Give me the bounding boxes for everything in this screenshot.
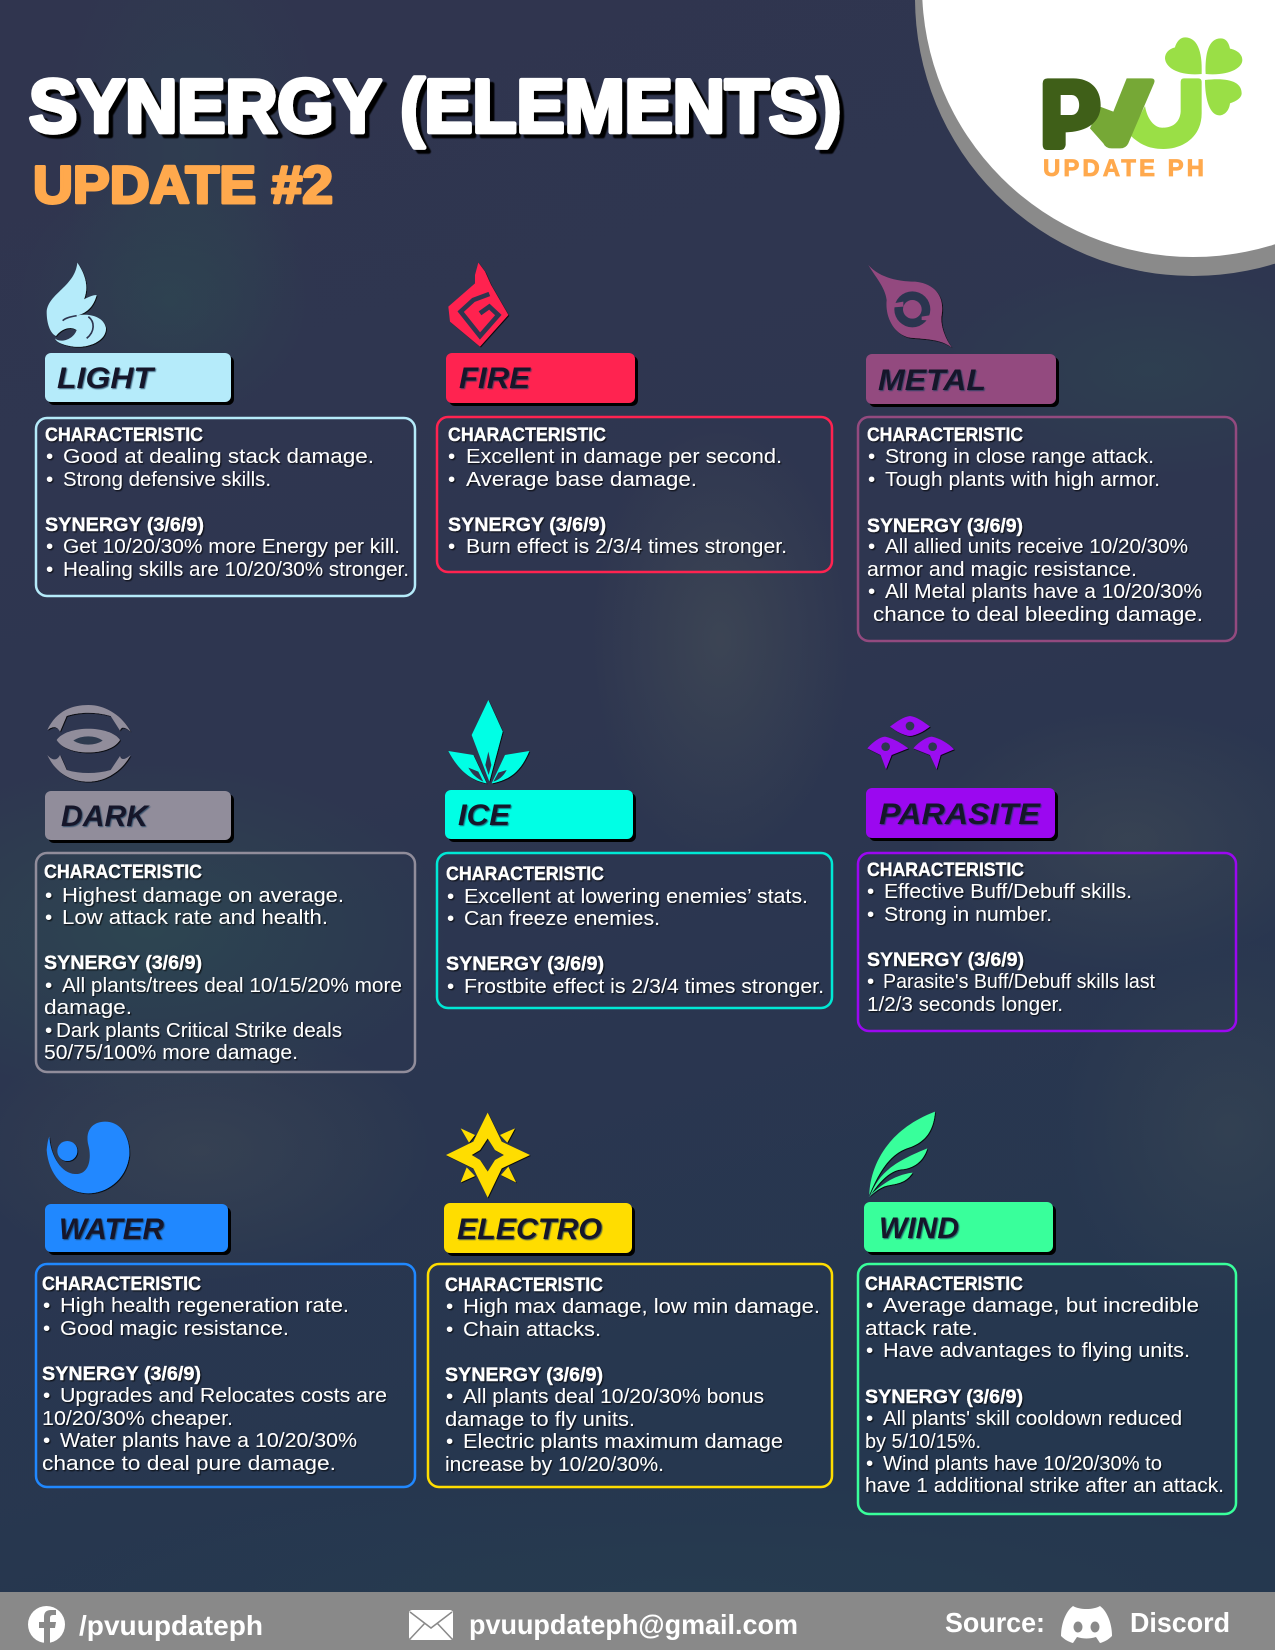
label: FIRE: FIRE [459, 362, 531, 395]
text box: parasite: SYNERGY (3/6/9) [867, 949, 1024, 971]
label: ICE: ICE [458, 799, 511, 832]
text box: ice: • [447, 975, 454, 998]
text box: water: High health regeneration rate. [60, 1294, 349, 1317]
text box: electro: • [446, 1295, 453, 1318]
text box: electro: Chain attacks. [463, 1318, 601, 1341]
panel: ice [437, 700, 832, 1008]
title: SYNERGY (ELEMENTS) [29, 64, 841, 148]
text box: fire: • [448, 535, 455, 558]
subtitle: UPDATE #2 [33, 156, 333, 215]
label: DARK: DARK [61, 800, 150, 833]
discord label: Discord [1130, 1607, 1230, 1638]
text box: metal: Strong in close range attack. [885, 445, 1154, 468]
text box: water: • [43, 1429, 50, 1452]
text box: electro: increase by 10/20/30%. [445, 1453, 664, 1476]
text box: dark: • [45, 1019, 52, 1042]
text box: wind: • [866, 1407, 873, 1430]
text box: water: • [43, 1294, 50, 1317]
text box: metal: CHARACTERISTIC [867, 424, 1023, 446]
text box: parasite: 1/2/3 seconds longer. [867, 993, 1063, 1016]
text box: light: • [46, 445, 53, 468]
text box: dark: SYNERGY (3/6/9) [44, 952, 202, 974]
text box: fire: SYNERGY (3/6/9) [448, 514, 606, 536]
icon: discord [1061, 1606, 1112, 1643]
email address: pvuupdateph@gmail.com [469, 1609, 798, 1640]
text box: dark [36, 853, 415, 1072]
text box: fire: • [448, 445, 455, 468]
label: PARASITE: PARASITE [879, 798, 1041, 831]
text box: fire: • [448, 468, 455, 491]
text box: light: Good at dealing stack damage. [63, 445, 374, 468]
text box: electro: • [446, 1318, 453, 1341]
label: WATER [45, 1204, 231, 1255]
text box: metal: • [868, 535, 875, 558]
text box: wind: by 5/10/15%. [865, 1430, 981, 1453]
text box: light [36, 418, 415, 596]
text box: light: Strong defensive skills. [63, 468, 271, 491]
text box: water: Upgrades and Relocates costs are [60, 1384, 387, 1407]
text box: wind: Have advantages to flying units. [883, 1339, 1190, 1362]
text box: ice: Frostbite effect is 2/3/4 times stronger. [464, 975, 824, 998]
text box: dark: 50/75/100% more damage. [44, 1041, 298, 1064]
icon: parasite [867, 716, 954, 769]
text box: wind: • [866, 1294, 873, 1317]
text box: wind [858, 1264, 1236, 1514]
text box: parasite: Strong in number. [884, 903, 1052, 926]
text box: electro: CHARACTERISTIC [445, 1274, 603, 1296]
text box: light: Healing skills are 10/20/30% stronger. [63, 558, 409, 581]
label: WATER: WATER [59, 1213, 164, 1246]
icon: water [47, 1122, 129, 1193]
icon: light flame [47, 263, 106, 347]
text box: metal: SYNERGY (3/6/9) [867, 515, 1023, 537]
text box: water: 10/20/30% cheaper. [42, 1407, 233, 1430]
panel: water [36, 1122, 415, 1487]
icon: electro [446, 1113, 530, 1198]
icon: dark [47, 705, 131, 782]
text box: parasite: CHARACTERISTIC [867, 859, 1024, 881]
text box: parasite: Effective Buff/Debuff skills. [884, 880, 1132, 903]
text box: metal: All allied units receive 10/20/30% [885, 535, 1188, 558]
text box: wind: Average damage, but incredible [883, 1294, 1199, 1317]
text box: wind: have 1 additional strike after an attack. [865, 1474, 1224, 1497]
text box: dark: • [45, 906, 52, 929]
label: LIGHT [45, 353, 234, 405]
text box: ice: CHARACTERISTIC [446, 863, 604, 885]
label: ELECTRO: ELECTRO [457, 1213, 602, 1246]
text box: parasite [858, 853, 1236, 1031]
icon: fire [448, 263, 508, 347]
text box: light: SYNERGY (3/6/9) [45, 514, 204, 536]
text box: parasite: • [867, 880, 874, 903]
text box: fire: Average base damage. [466, 468, 697, 491]
facebook handle: /pvuupdateph [79, 1610, 263, 1641]
text box: light: • [46, 535, 53, 558]
logo corner circle [915, 0, 1275, 276]
text box: water: CHARACTERISTIC [42, 1273, 201, 1295]
text box: electro: • [446, 1430, 453, 1453]
icon: wind [868, 1112, 935, 1197]
text box: wind: attack rate. [865, 1317, 978, 1340]
text box: metal: • [868, 580, 875, 603]
label: DARK [45, 791, 234, 843]
text box: dark: Low attack rate and health. [62, 906, 328, 929]
text box: parasite: • [867, 970, 874, 993]
panel: dark [36, 705, 415, 1072]
text box: ice: Excellent at lowering enemies’ stats. [464, 885, 808, 908]
panel: light [36, 263, 415, 596]
text box: ice [437, 853, 832, 1008]
label: PARASITE [866, 788, 1058, 841]
text box: metal: • [868, 445, 875, 468]
text box: water [36, 1264, 415, 1487]
label: METAL [866, 354, 1059, 407]
text box: dark: • [45, 884, 52, 907]
label: METAL: METAL [878, 364, 986, 397]
text box: dark: CHARACTERISTIC [44, 861, 202, 883]
text box: water: Water plants have a 10/20/30% [60, 1429, 357, 1452]
text box: dark: Dark plants Critical Strike deals [56, 1019, 342, 1042]
text box: water: Good magic resistance. [60, 1317, 289, 1340]
label: FIRE [446, 353, 638, 406]
text box: water: • [43, 1384, 50, 1407]
text box: light: Get 10/20/30% more Energy per kill. [63, 535, 400, 558]
text box: light: • [46, 558, 53, 581]
text box: wind: CHARACTERISTIC [865, 1273, 1023, 1295]
text box: water: SYNERGY (3/6/9) [42, 1363, 201, 1385]
logo: PVU Update PH: UPDATE PH [1043, 155, 1204, 182]
text box: light: • [46, 468, 53, 491]
text box: metal: armor and magic resistance. [867, 558, 1137, 581]
text box: fire: Excellent in damage per second. [466, 445, 782, 468]
text box: water: • [43, 1317, 50, 1340]
icon: ice [448, 700, 529, 783]
text box: metal: chance to deal bleeding damage. [873, 603, 1203, 626]
text box: ice: • [447, 907, 454, 930]
text box: metal: • [868, 468, 875, 491]
text box: parasite: • [867, 903, 874, 926]
text box: electro [428, 1264, 832, 1487]
icon: facebook [28, 1606, 65, 1643]
text box: electro: High max damage, low min damage. [463, 1295, 820, 1318]
text box: metal [858, 417, 1236, 641]
label: WIND [864, 1202, 1056, 1255]
text box: metal: Tough plants with high armor. [885, 468, 1160, 491]
text box: electro: damage to fly units. [445, 1408, 635, 1431]
panel: wind [858, 1112, 1236, 1514]
panel: electro [428, 1113, 832, 1487]
label: ICE [445, 790, 636, 842]
panel: fire [437, 263, 832, 572]
text box: electro: Electric plants maximum damage [463, 1430, 783, 1453]
text box: light: CHARACTERISTIC [45, 424, 203, 446]
text box: fire [437, 417, 832, 572]
label: ELECTRO [444, 1203, 635, 1256]
text box: dark: All plants/trees deal 10/15/20% more [62, 974, 402, 997]
text box: ice: SYNERGY (3/6/9) [446, 953, 604, 975]
source label: Source: [945, 1607, 1045, 1638]
label: WIND: WIND [879, 1212, 959, 1245]
panel: parasite [858, 716, 1236, 1031]
text box: dark: Highest damage on average. [62, 884, 344, 907]
text box: electro: • [446, 1385, 453, 1408]
logo: PVU Update PH [1043, 37, 1242, 182]
text box: parasite: Parasite's Buff/Debuff skills last [883, 970, 1155, 993]
text box: electro: All plants deal 10/20/30% bonus [463, 1385, 764, 1408]
text box: dark: • [45, 974, 52, 997]
text box: fire: Burn effect is 2/3/4 times stronger. [466, 535, 787, 558]
label: LIGHT: LIGHT [57, 362, 156, 395]
text box: dark: damage. [44, 996, 132, 1019]
text box: ice: Can freeze enemies. [464, 907, 660, 930]
icon: metal [868, 265, 952, 347]
panel: metal [858, 265, 1236, 641]
text box: wind: SYNERGY (3/6/9) [865, 1386, 1023, 1408]
text box: wind: • [866, 1339, 873, 1362]
text box: electro: SYNERGY (3/6/9) [445, 1364, 603, 1386]
text box: water: chance to deal pure damage. [42, 1452, 336, 1475]
text box: wind: All plants' skill cooldown reduced [883, 1407, 1182, 1430]
text box: metal: All Metal plants have a 10/20/30% [885, 580, 1202, 603]
text box: wind: • [866, 1452, 873, 1475]
text box: ice: • [447, 885, 454, 908]
icon: email envelope [409, 1610, 453, 1640]
footer bar [0, 1592, 1275, 1650]
text box: wind: Wind plants have 10/20/30% to [883, 1452, 1162, 1475]
text box: fire: CHARACTERISTIC [448, 424, 606, 446]
